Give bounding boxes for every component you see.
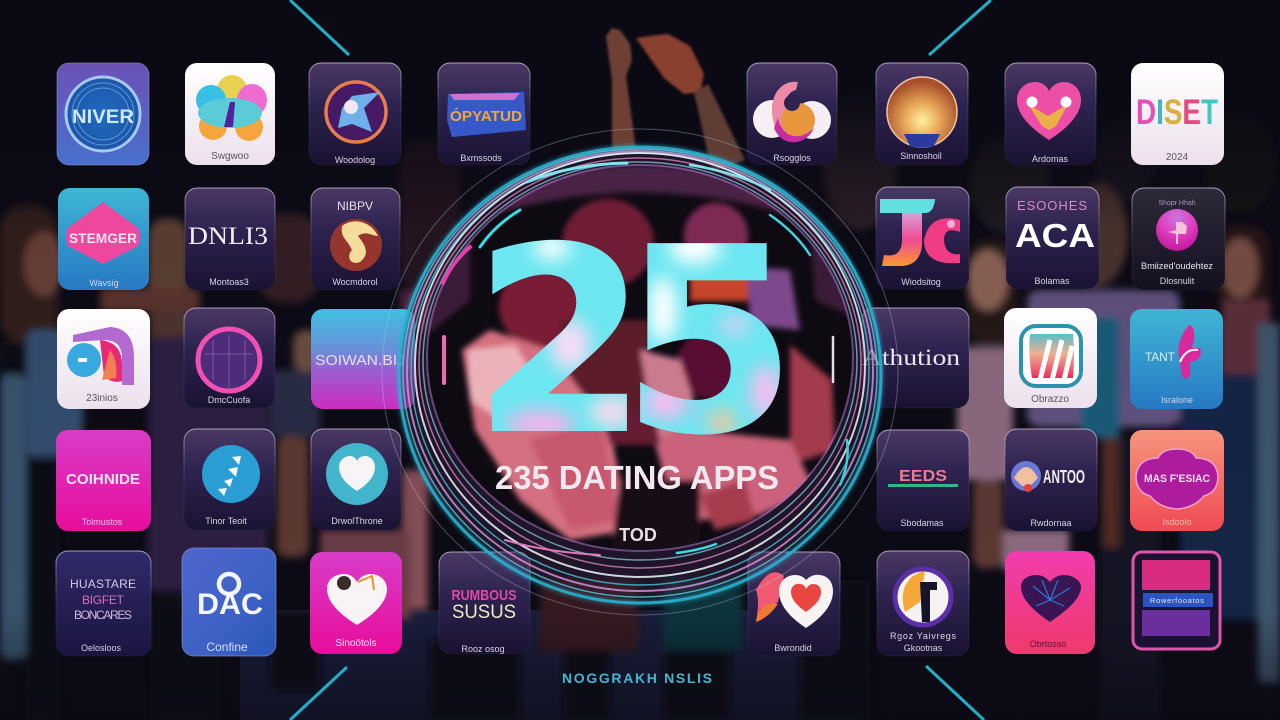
app tile: ESOOHES ACA: ESOOHES: [1017, 198, 1087, 213]
app tile: dark heart: Obrtosso: [1030, 639, 1066, 649]
icon: small globe: [1011, 461, 1041, 492]
app tile: pink ring globe: [184, 308, 275, 408]
icon: pink f: [1178, 325, 1201, 379]
photo of couple inside ring: [420, 160, 860, 560]
app tile: HUASTARE: BONCARES: [74, 608, 132, 622]
app tile: tant f: Isralone: [1161, 395, 1193, 405]
app tile: SUSUS: Rooz osog: [461, 644, 505, 654]
app tile: SUSUS: [439, 552, 530, 654]
app tile: NIBPV: Wocmdorol: [332, 277, 378, 287]
neon accent lines: [290, 0, 991, 720]
icon: bird in ring: [326, 82, 386, 142]
app tile: golden orb: [876, 63, 968, 165]
app tile: DNLI3: DNLI3: [188, 223, 268, 250]
app tile: EEDS: EEDS: [899, 468, 947, 485]
icon: rainbow arcs: [67, 327, 134, 385]
app tile: magenta badge: Dlosnulit: [1160, 276, 1195, 286]
app tile: NIVER: [57, 63, 149, 165]
app tile: magenta badge: Bmiized'oudehtez: [1141, 261, 1214, 271]
app tile: pink ring globe: DmcCuofa: [208, 395, 250, 405]
poster pink band: [1142, 560, 1210, 590]
app tile: DAC: Confine: [206, 640, 248, 654]
app tile: dark heart: [1005, 551, 1095, 654]
floor: [240, 610, 860, 720]
app tile: Athution: Athution: [862, 345, 961, 370]
app tile: ANTOO: ANTOO: [1043, 467, 1085, 487]
icon: magenta circle: [1156, 209, 1198, 251]
app tile: purple ring r: [877, 551, 969, 656]
app tile: STEMGER: Wavsig: [89, 278, 119, 288]
app tile: blue shards: [184, 429, 275, 530]
app tile: NIVER: NIVER: [72, 107, 134, 128]
app tile: ESOOHES ACA: [1006, 187, 1099, 289]
app tile: ESOOHES ACA: ACA: [1015, 217, 1095, 254]
icon: NIVER disc: [66, 77, 140, 151]
app tile: HUASTARE: HUASTARE: [70, 577, 136, 591]
app tile: COIHNIDE: [56, 430, 151, 531]
poster purple floor: [1142, 610, 1210, 636]
icon: pink heart: [1017, 82, 1081, 140]
app tile: double hearts: Bwrondid: [774, 643, 812, 653]
app tile: golden orb: Sinnoshoil: [900, 151, 942, 161]
app tile: NIBPV: [311, 188, 400, 290]
colored wordmark: DISET: [1136, 93, 1218, 132]
app tile: JC: [876, 187, 969, 289]
poster blue band: [1143, 593, 1213, 607]
app tile: blue shards: Tinor Teoit: [205, 516, 247, 526]
app tile: magenta badge: [1132, 188, 1225, 290]
icon: pink ring: [198, 329, 260, 391]
app tile: HUASTARE: BIGFET: [82, 593, 125, 607]
app tile: DAC: [182, 548, 276, 656]
app tile: arcs: [57, 309, 150, 409]
app tile: teal heart: DrwolThrone: [331, 516, 383, 526]
ring strokes: [382, 129, 898, 615]
app tile: orange ring bird: Woodolog: [335, 155, 375, 165]
icon: flower: [196, 75, 267, 141]
icon: purple cloud badge: [1136, 449, 1218, 509]
small label: TOD: TOD: [619, 525, 657, 545]
ring glass tint: [399, 146, 881, 598]
subtitle: 235 dating apps: 235 DATING APPS: [495, 459, 779, 496]
app tile: STEMGER: STEMGER: [69, 230, 137, 246]
icon: white heart: [327, 574, 387, 625]
app tile: hook and circles: [747, 63, 837, 165]
icon: pink badge: [66, 202, 140, 264]
app tile: ESOOHES ACA: Bolamas: [1034, 276, 1070, 286]
left people: [0, 205, 58, 345]
app tile: tant f: TANT: [1145, 350, 1176, 364]
inner neon arcs: [443, 163, 848, 555]
app tile: striped square: [1004, 308, 1097, 408]
icon: cap and heart: [756, 572, 833, 628]
app tile: DISET: [1131, 63, 1224, 165]
app tile: EEDS: Sbodamas: [900, 518, 944, 528]
app tile: orange ring bird: [309, 63, 401, 165]
app tile: HUASTARE: [56, 551, 151, 656]
app tile: SOIWAN gradient: SOIWAN.BIJ: [315, 352, 405, 369]
icon: banner: ÓPYATUD: [450, 107, 522, 125]
icon: JC letters: [880, 199, 960, 266]
icon: teal circle heart: [326, 443, 388, 505]
app tile: double hearts: [748, 552, 840, 656]
app tile: JC: Wiodsitog: [901, 277, 941, 287]
app tile: blue banner logo: [438, 63, 530, 165]
raised arms and hands: [606, 28, 745, 172]
app tile: poster: Rowerfooatos: [1150, 596, 1204, 605]
icon: blue circle shards: [202, 445, 260, 503]
icon: red cream blob: [330, 219, 382, 271]
icon: ring with r: [895, 569, 951, 625]
app tile: SUSUS: SUSUS: [452, 602, 516, 623]
app tile: arcs: 23inios: [86, 393, 118, 404]
app tile: purple ring r: Gkootnas: [904, 643, 943, 653]
app tile: COIHNIDE: COIHNIDE: [66, 471, 140, 488]
app tile: white flower: [185, 63, 275, 165]
app tile: DNLI3: [185, 188, 275, 290]
app tile: white flower: Swgwoo: [211, 151, 249, 162]
app tile: COIHNIDE: Tolmustos: [82, 517, 123, 527]
app tile: magenta white heart: Sinoötols: [335, 638, 377, 649]
app tile: purple ring r: Rgoz Yaivregs: [890, 631, 956, 641]
app tile: HUASTARE: Oelosloos: [81, 643, 122, 653]
app tile: DISET: 2024: [1166, 152, 1189, 163]
app tile: coral cloud: MAS F'ESIAC: [1144, 473, 1210, 485]
centre bottom: [540, 580, 638, 652]
app tile: poster: [1133, 552, 1220, 649]
app tile: SOIWAN gradient: [311, 309, 415, 409]
app tile: coral cloud: Isdoolo: [1162, 517, 1192, 527]
app tile: striped square: Obrazzo: [1031, 394, 1069, 405]
app tile: ANTOO: Rwdornaa: [1030, 518, 1072, 528]
app tile: EEDS: [877, 430, 969, 531]
app tile: teal heart: [311, 429, 401, 530]
app tile: coral cloud: [1130, 430, 1224, 531]
icon: O ring: [219, 574, 239, 594]
right people: [822, 90, 898, 230]
app tile: pink heart: [1005, 63, 1096, 165]
icon: golden orb: [887, 77, 957, 148]
app tile: STEMGER: [58, 188, 149, 290]
big number 25: 25: [473, 193, 796, 490]
icon: striped square: [1021, 326, 1081, 386]
icon: dark heart: [1021, 575, 1081, 622]
app tile: magenta white heart: [310, 552, 402, 654]
app tile: magenta badge: Shopr Hhah: [1158, 200, 1196, 207]
app tile: hook and circles: Rsogglos: [773, 153, 811, 163]
app tile: DAC: DAC: [197, 588, 263, 621]
app tile: NIBPV: NIBPV: [337, 199, 373, 213]
app tile: ANTOO: [1005, 429, 1097, 531]
central glass ring: [382, 129, 898, 615]
app tile: pink heart: Ardomas: [1032, 154, 1069, 164]
app tile: tant f: [1130, 309, 1223, 409]
app tile: SUSUS: RUMBOUS: [452, 587, 516, 604]
app tile: blue banner logo: Bxmssods: [460, 153, 502, 163]
app tile: DNLI3: Montoas3: [209, 277, 249, 287]
footer text: NOGGRAKH NSLIS: [562, 670, 712, 686]
icon: swirl: [753, 82, 831, 142]
app tile: Athution: [862, 308, 969, 408]
